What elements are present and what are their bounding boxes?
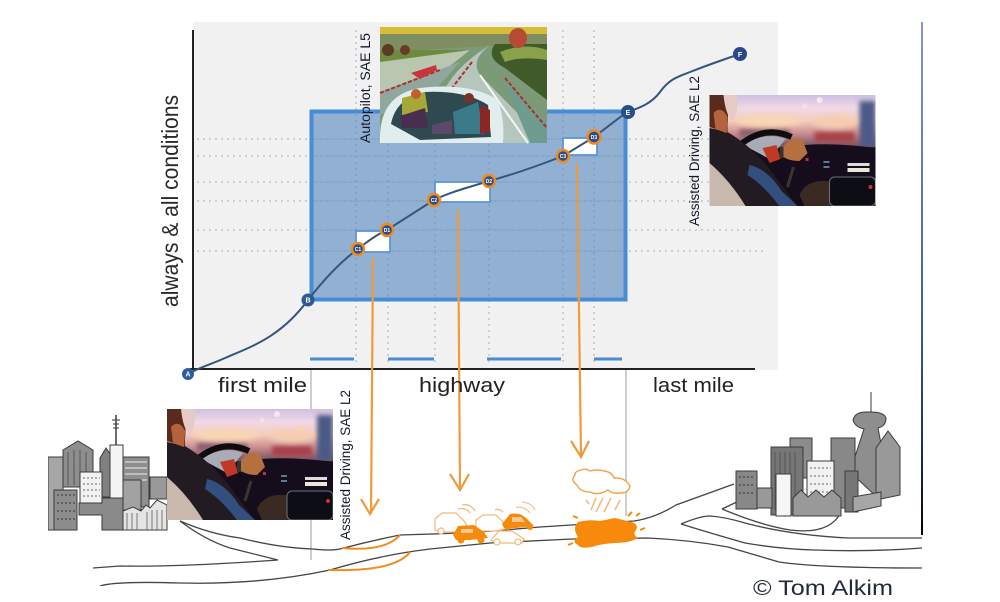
- arrow 3: weather: [571, 163, 589, 457]
- road: [93, 484, 922, 586]
- node E: E: [626, 110, 631, 117]
- photo: retro autopilot car: [380, 27, 547, 143]
- node C1: C1: [355, 247, 361, 253]
- puddle splashes: [568, 512, 645, 545]
- node C2: C2: [431, 198, 437, 204]
- label: first mile: first mile: [218, 375, 307, 397]
- node B: [302, 294, 314, 306]
- automation curve: [188, 54, 740, 374]
- node C3: [557, 150, 569, 162]
- axes: [190, 30, 755, 369]
- node C1: [352, 243, 364, 255]
- arrow 1: first-mile merge: [361, 258, 379, 514]
- left city: [48, 415, 167, 530]
- blue operational design domain box: [312, 112, 626, 300]
- arrow 2: traffic: [450, 210, 469, 490]
- chart panel background: [193, 22, 778, 370]
- node D2: [483, 175, 495, 187]
- vertical axis label: always & all conditions: [157, 95, 183, 307]
- node D3: D3: [591, 135, 597, 141]
- node A: [182, 368, 194, 380]
- label: Assisted Driving lower: Assisted Driving, SAE L2: [338, 390, 353, 540]
- node D1: D1: [384, 228, 390, 234]
- label: Autopilot SAE L5: Autopilot, SAE L5: [358, 33, 373, 143]
- traffic cars icon: [435, 502, 535, 545]
- blue availability dashes: [310, 358, 622, 360]
- node E: [621, 105, 635, 119]
- label: highway: highway: [419, 375, 505, 397]
- node F: F: [738, 52, 743, 59]
- orange on-ramp highlights: [328, 535, 410, 570]
- rain cloud icon: [573, 469, 630, 512]
- right city: [736, 392, 900, 516]
- label: last mile: last mile: [653, 375, 734, 397]
- node D1: [381, 224, 393, 236]
- label: Assisted Driving upper: Assisted Driving, SAE L2: [687, 76, 702, 226]
- photo: assisted driving, lower left: [167, 409, 333, 520]
- copyright credit: © Tom Alkim: [753, 577, 893, 600]
- curve nodes: [182, 47, 747, 380]
- node C2: [428, 194, 440, 206]
- node C3: C3: [560, 154, 566, 160]
- node A: A: [185, 372, 191, 378]
- right edge line: [921, 22, 923, 535]
- photo: assisted driving, upper right: [710, 95, 876, 206]
- node B: B: [305, 298, 311, 304]
- zone divider lines: [311, 370, 626, 560]
- node D2: D2: [486, 179, 492, 185]
- orange puddle: [574, 518, 638, 548]
- white gap boxes: [356, 138, 597, 252]
- node D3: [588, 130, 600, 144]
- horizontal dotted grid: [197, 30, 765, 365]
- node F: [733, 47, 747, 61]
- dotted grid over blue box: [314, 114, 623, 297]
